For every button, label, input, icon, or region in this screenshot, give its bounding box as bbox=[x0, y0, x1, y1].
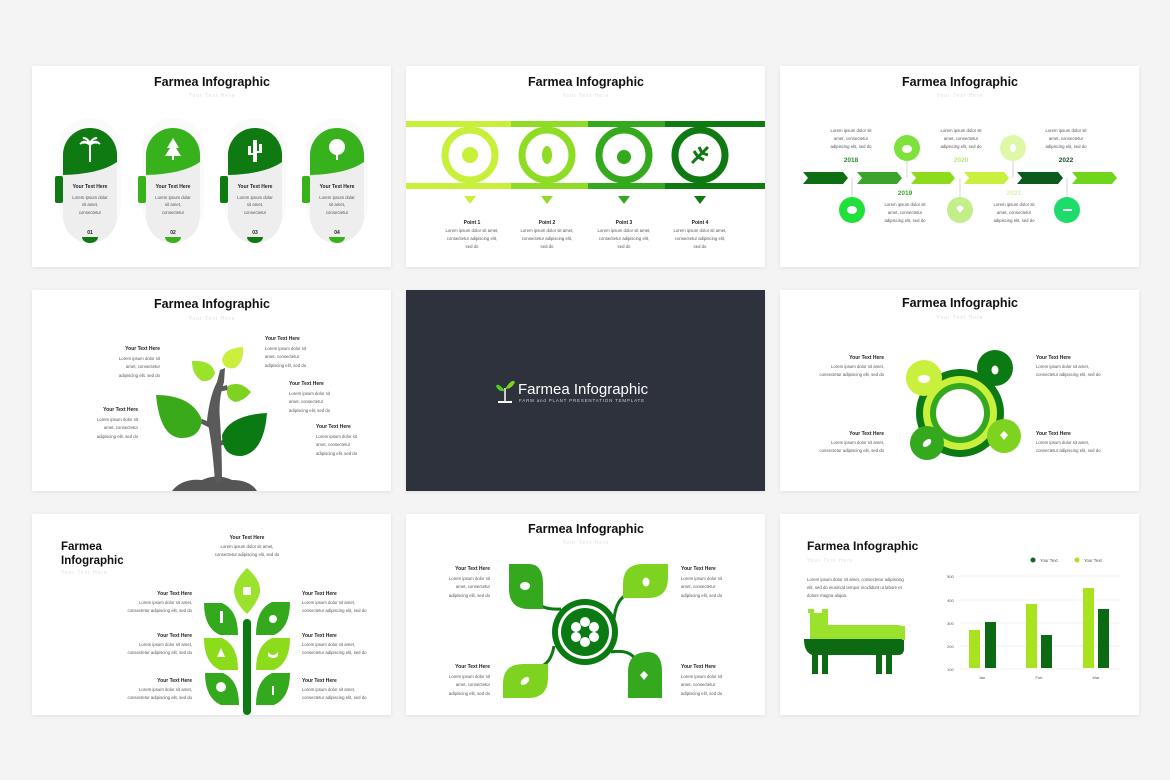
text blocks: Your Text Here bbox=[455, 664, 490, 670]
text blocks: Your Text Here bbox=[289, 381, 324, 387]
years and texts: Lorem ipsum dolor sit bbox=[940, 128, 982, 133]
bar chart: Jan bbox=[979, 675, 985, 680]
description: dolore magna aliqua. bbox=[807, 593, 847, 598]
title bbox=[807, 539, 919, 564]
text blocks bbox=[128, 535, 367, 700]
bar chart: 400 bbox=[947, 598, 954, 603]
point texts: consectetur adipiscing elit, bbox=[675, 236, 725, 241]
text blocks: Your Text Here bbox=[681, 664, 716, 670]
text blocks: adipiscing elit, sed do bbox=[97, 434, 139, 439]
leaf tree bbox=[204, 568, 290, 715]
icon: sprout bbox=[496, 381, 515, 403]
years and texts: amet, consectetur bbox=[1049, 136, 1084, 141]
bar chart: 200 bbox=[947, 644, 954, 649]
point texts: Lorem ipsum dolor sit amet, bbox=[520, 228, 574, 233]
title bbox=[61, 541, 124, 576]
point texts: consectetur adipiscing elit, bbox=[447, 236, 497, 241]
cards: consectetur bbox=[326, 210, 349, 215]
years and texts: Lorem ipsum dolor sit bbox=[830, 128, 872, 133]
text blocks: adipiscing elit, sed do bbox=[119, 373, 161, 378]
text blocks: Your Text Here bbox=[681, 566, 716, 572]
text blocks bbox=[449, 566, 723, 696]
text blocks: amet, consectetur bbox=[265, 354, 300, 359]
cover title: FARM and PLANT PRESENTATION TEMPLATE bbox=[519, 398, 645, 403]
years and texts: adipiscing elit, sed do bbox=[884, 218, 926, 223]
text blocks: Lorem ipsum dolor sit amet, bbox=[831, 364, 884, 369]
cards: Lorem ipsum dolar bbox=[319, 195, 355, 200]
title: Farmea Infographic bbox=[154, 297, 270, 311]
text blocks: Lorem ipsum dolor sit bbox=[119, 356, 161, 361]
text blocks: Lorem ipsum dolor sit bbox=[681, 674, 723, 679]
text blocks: Lorem ipsum dolor sit amet, bbox=[831, 440, 884, 445]
description: elit, sed do eiusmod tempor incididunt ut labore et bbox=[807, 585, 903, 590]
title: Your Text Here bbox=[189, 93, 235, 99]
text blocks: consectetur adipiscing elit, sed do bbox=[215, 552, 280, 557]
title: Your Text Here bbox=[189, 316, 235, 322]
years and texts: amet, consectetur bbox=[888, 210, 923, 215]
years and texts: Lorem ipsum dolor sit bbox=[993, 202, 1035, 207]
text blocks: amet, consectetur bbox=[289, 399, 324, 404]
plant illustration bbox=[156, 347, 267, 491]
title bbox=[528, 522, 644, 546]
years and texts: adipiscing elit, sed do bbox=[830, 144, 872, 149]
text blocks: Lorem ipsum dolor sit bbox=[449, 674, 491, 679]
ring diagram bbox=[906, 350, 1021, 460]
cards: 01 bbox=[87, 230, 93, 236]
text blocks: Your Text Here bbox=[157, 633, 192, 639]
text blocks: adipiscing elit, sed do bbox=[265, 363, 307, 368]
point texts: sed do bbox=[618, 244, 631, 249]
title bbox=[528, 75, 644, 99]
years and texts: 2022 bbox=[1059, 157, 1074, 164]
text blocks: adipiscing elit, sed do bbox=[681, 593, 723, 598]
text blocks: Your Text Here bbox=[1036, 431, 1071, 437]
description bbox=[807, 577, 904, 598]
cards: Your Text Here bbox=[320, 184, 355, 190]
years and texts: Lorem ipsum dolor sit bbox=[884, 202, 926, 207]
years and texts bbox=[830, 128, 1087, 223]
title bbox=[154, 75, 270, 99]
text blocks bbox=[97, 336, 358, 456]
title: Farmea Infographic bbox=[528, 75, 644, 89]
text blocks: Lorem ipsum dolor sit amet, bbox=[1036, 440, 1089, 445]
panel: slide 1 pill cards bbox=[32, 66, 391, 267]
title bbox=[154, 297, 270, 322]
text blocks bbox=[820, 355, 1101, 453]
point texts: Lorem ipsum dolor sit amet, bbox=[597, 228, 651, 233]
text blocks: Your Text Here bbox=[455, 566, 490, 572]
band bbox=[406, 121, 765, 204]
years and texts: 2021 bbox=[1007, 190, 1022, 197]
text blocks: Lorem ipsum dolor sit amet, bbox=[139, 687, 192, 692]
point texts bbox=[445, 220, 727, 249]
cards: 04 bbox=[334, 230, 340, 236]
text blocks: consectetur adipiscing elit, sed do bbox=[302, 650, 367, 655]
years and texts: 2020 bbox=[954, 157, 969, 164]
title bbox=[902, 75, 1018, 99]
text blocks: Lorem ipsum dolor sit bbox=[681, 576, 723, 581]
cards: Your Text Here bbox=[156, 184, 191, 190]
text blocks: Your Text Here bbox=[230, 535, 265, 541]
text blocks: Your Text Here bbox=[302, 591, 337, 597]
text blocks: amet, consectetur bbox=[456, 682, 491, 687]
point texts: Lorem ipsum dolor sit amet, bbox=[445, 228, 499, 233]
text blocks: Your Text Here bbox=[265, 336, 300, 342]
panel: slide 2 points band bbox=[406, 66, 765, 267]
years and texts: Lorem ipsum dolor sit bbox=[1045, 128, 1087, 133]
panel: slide 9 cow bar chart bbox=[780, 514, 1139, 715]
text blocks: adipiscing elit, sed do bbox=[289, 408, 331, 413]
title: Infographic bbox=[61, 555, 124, 567]
text blocks: consectetur adipiscing elit, sed do bbox=[1036, 448, 1101, 453]
bar chart: 100 bbox=[947, 667, 954, 672]
text blocks: Lorem ipsum dolor sit bbox=[289, 391, 331, 396]
cards: sit amet, bbox=[82, 202, 98, 207]
years and texts: 2019 bbox=[898, 190, 913, 197]
legend: Your Text bbox=[1084, 558, 1102, 563]
text blocks: Lorem ipsum dolor sit amet, bbox=[220, 544, 274, 549]
text blocks: amet, consectetur bbox=[456, 584, 491, 589]
bar chart bbox=[947, 574, 1120, 680]
hub diagram bbox=[503, 564, 668, 698]
text blocks: Your Text Here bbox=[103, 407, 138, 413]
point texts: sed do bbox=[466, 244, 479, 249]
cards: consectetur bbox=[79, 210, 102, 215]
panel: slide 4 plant bbox=[32, 290, 391, 491]
description: Lorem ipsum dolor sit amet, consectetur adipiscing bbox=[807, 577, 904, 582]
title: Your Text Here bbox=[807, 558, 854, 564]
timeline arrows bbox=[803, 135, 1117, 223]
legend: Your Text bbox=[1040, 558, 1058, 563]
text blocks: Your Text Here bbox=[125, 346, 160, 352]
point texts: Point 2 bbox=[539, 220, 556, 226]
text blocks: consectetur adipiscing elit, sed do bbox=[128, 650, 193, 655]
cover title: Farmea Infographic bbox=[518, 381, 649, 398]
text blocks: consectetur adipiscing elit, sed do bbox=[302, 695, 367, 700]
text blocks: Your Text Here bbox=[849, 355, 884, 361]
point texts: Point 4 bbox=[692, 220, 709, 226]
title: Farmea bbox=[61, 541, 103, 553]
text blocks: adipiscing elit, sed do bbox=[681, 691, 723, 696]
text blocks: consectetur adipiscing elit, sed do bbox=[128, 695, 193, 700]
bar chart: Mar bbox=[1093, 675, 1100, 680]
text blocks: amet, consectetur bbox=[126, 364, 161, 369]
point texts: sed do bbox=[694, 244, 707, 249]
text blocks: amet, consectetur bbox=[681, 584, 716, 589]
text blocks: Lorem ipsum dolor sit bbox=[97, 417, 139, 422]
years and texts: amet, consectetur bbox=[834, 136, 869, 141]
years and texts: 2018 bbox=[844, 157, 859, 164]
cards: consectetur bbox=[244, 210, 267, 215]
title: Farmea Infographic bbox=[528, 522, 644, 536]
text blocks: Lorem ipsum dolor sit amet, bbox=[302, 687, 355, 692]
title: Your Text Here bbox=[563, 93, 609, 99]
point texts: consectetur adipiscing elit, bbox=[522, 236, 572, 241]
text blocks: Lorem ipsum dolor sit amet, bbox=[139, 642, 192, 647]
text blocks: adipiscing elit, sed do bbox=[449, 593, 491, 598]
text blocks: amet, consectetur bbox=[104, 425, 139, 430]
cards: sit amet, bbox=[165, 202, 181, 207]
text blocks: Lorem ipsum dolor sit bbox=[449, 576, 491, 581]
text blocks: consectetur adipiscing elit, sed do bbox=[302, 608, 367, 613]
text blocks: consectetur adipiscing elit, sed do bbox=[1036, 372, 1101, 377]
text blocks: adipiscing elit, sed do bbox=[449, 691, 491, 696]
title: Farmea Infographic bbox=[154, 75, 270, 89]
cards: Lorem ipsum dolar bbox=[237, 195, 273, 200]
bar chart: 500 bbox=[947, 574, 954, 579]
panel: slide 5 dark cover bbox=[406, 290, 765, 491]
cards bbox=[55, 118, 368, 243]
text blocks: consectetur adipiscing elit, sed do bbox=[820, 448, 885, 453]
legend bbox=[1030, 558, 1102, 563]
title: Your Text Here bbox=[937, 315, 983, 321]
cards: sit amet, bbox=[329, 202, 345, 207]
icon: cow bbox=[804, 609, 905, 674]
text blocks: Lorem ipsum dolor sit amet, bbox=[302, 600, 355, 605]
text blocks: consectetur adipiscing elit, sed do bbox=[128, 608, 193, 613]
text blocks: Your Text Here bbox=[302, 678, 337, 684]
panel: slide 3 timeline bbox=[780, 66, 1139, 267]
cards: 03 bbox=[252, 230, 258, 236]
years and texts: adipiscing elit, sed do bbox=[940, 144, 982, 149]
text blocks: Lorem ipsum dolor sit bbox=[316, 434, 358, 439]
text blocks: Lorem ipsum dolor sit amet, bbox=[1036, 364, 1089, 369]
point texts: Lorem ipsum dolor sit amet, bbox=[673, 228, 727, 233]
text blocks: amet, consectetur bbox=[681, 682, 716, 687]
years and texts: amet, consectetur bbox=[997, 210, 1032, 215]
bar chart: Feb bbox=[1036, 675, 1043, 680]
text blocks: consectetur adipiscing elit, sed do bbox=[820, 372, 885, 377]
text blocks: Your Text Here bbox=[157, 678, 192, 684]
cards: sit amet, bbox=[247, 202, 263, 207]
cards: consectetur bbox=[162, 210, 185, 215]
cards: Lorem ipsum dolar bbox=[72, 195, 108, 200]
text blocks: adipiscing elit, sed do bbox=[316, 451, 358, 456]
text blocks: Your Text Here bbox=[302, 633, 337, 639]
title: Farmea Infographic bbox=[902, 75, 1018, 89]
point texts: sed do bbox=[541, 244, 554, 249]
text blocks: Your Text Here bbox=[157, 591, 192, 597]
text blocks: Lorem ipsum dolor sit amet, bbox=[302, 642, 355, 647]
title: Your Text Here bbox=[563, 540, 609, 546]
point texts: Point 3 bbox=[616, 220, 633, 226]
cards: 02 bbox=[170, 230, 176, 236]
years and texts: amet, consectetur bbox=[944, 136, 979, 141]
panel: slide 8 flower hub bbox=[406, 514, 765, 715]
bar chart: 300 bbox=[947, 621, 954, 626]
title: Farmea Infographic bbox=[902, 296, 1018, 310]
point texts: consectetur adipiscing elit, bbox=[599, 236, 649, 241]
title bbox=[902, 296, 1018, 321]
title: Farmea Infographic bbox=[807, 539, 919, 553]
panel: slide 6 rings bbox=[780, 290, 1139, 491]
text blocks: Your Text Here bbox=[849, 431, 884, 437]
text blocks: Your Text Here bbox=[1036, 355, 1071, 361]
panel: slide 7 leaf tree bbox=[32, 514, 391, 715]
years and texts: adipiscing elit, sed do bbox=[1045, 144, 1087, 149]
cards: Your Text Here bbox=[73, 184, 108, 190]
cards: Your Text Here bbox=[238, 184, 273, 190]
text blocks: Lorem ipsum dolor sit bbox=[265, 346, 307, 351]
text blocks: Lorem ipsum dolor sit amet, bbox=[139, 600, 192, 605]
title: Your Text Here bbox=[937, 93, 983, 99]
title: Your Text Here bbox=[61, 570, 108, 576]
text blocks: Your Text Here bbox=[316, 424, 351, 430]
point texts: Point 1 bbox=[464, 220, 481, 226]
cards: Lorem ipsum dolar bbox=[155, 195, 191, 200]
text blocks: amet, consectetur bbox=[316, 442, 351, 447]
years and texts: adipiscing elit, sed do bbox=[993, 218, 1035, 223]
